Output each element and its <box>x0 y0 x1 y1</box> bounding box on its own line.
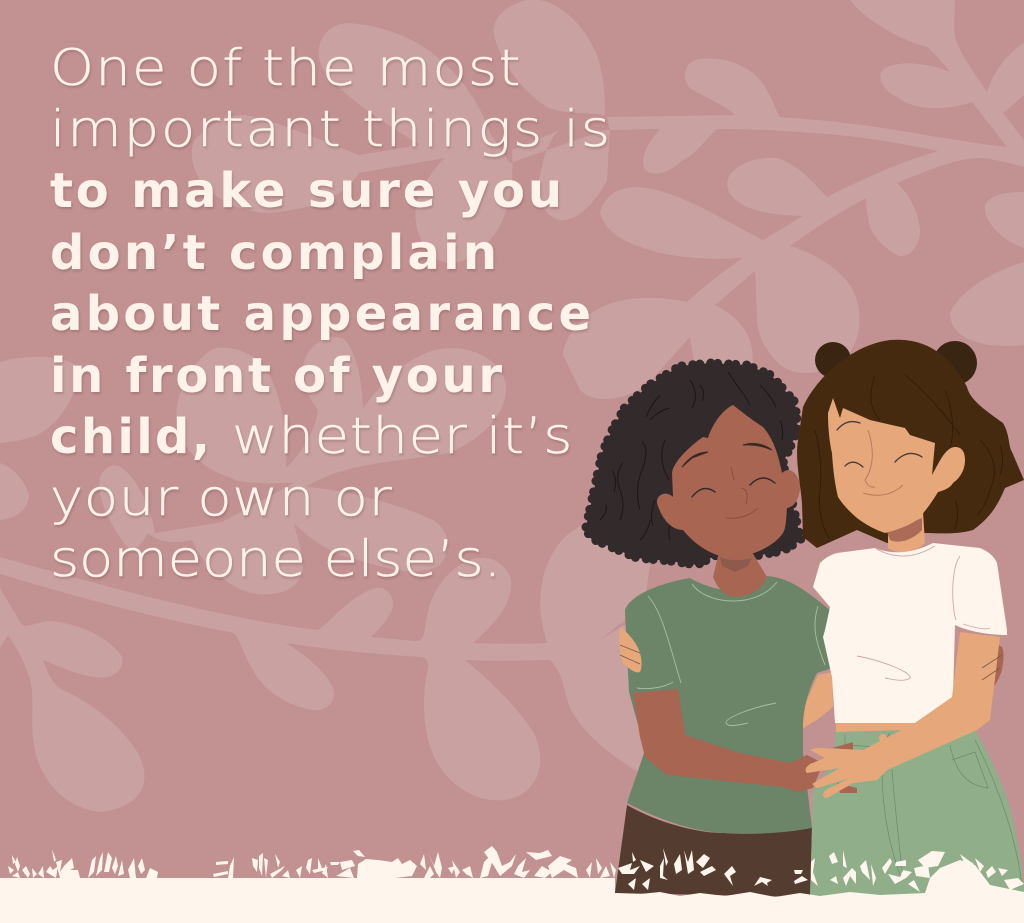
far left sprig <box>0 588 144 812</box>
skirt seams <box>845 733 1022 885</box>
left figure: woman with curly hair <box>586 363 832 897</box>
hair buns <box>815 342 851 378</box>
grass shards centre <box>312 846 616 878</box>
eyebrows <box>682 443 772 467</box>
shirt fold lines <box>637 582 825 726</box>
line two: important things is <box>50 100 610 158</box>
forearm and hand <box>806 632 1000 798</box>
upper leaf near top <box>494 0 605 115</box>
line seven remainder: whether it’s <box>232 407 572 465</box>
dark fingers behind hand <box>832 742 857 793</box>
shirt lines <box>857 546 990 680</box>
right figure: woman with brown hair <box>797 340 1024 900</box>
trousers <box>615 805 812 897</box>
bold line five: about appearance <box>50 286 591 342</box>
bold line four: don’t complain <box>50 225 497 281</box>
finger lines <box>620 645 1002 680</box>
grass on clothing <box>618 848 1024 892</box>
green t-shirt <box>625 576 832 834</box>
midriff <box>836 716 916 733</box>
left woman's eyes <box>692 478 775 497</box>
face and ears <box>657 405 800 558</box>
lower branch with leaves <box>0 520 660 800</box>
left arm behind <box>803 672 833 728</box>
headline text <box>50 39 610 588</box>
hair curls <box>600 372 783 540</box>
hair strands <box>815 375 1002 540</box>
upper right branch <box>563 0 1024 399</box>
bold line six: in front of your <box>50 348 502 404</box>
top centre leaves <box>192 23 610 263</box>
line one: One of the most <box>50 39 520 97</box>
brown hair <box>797 340 1024 548</box>
left edge leaves <box>0 357 78 520</box>
green skirt <box>810 730 1024 900</box>
ground <box>0 860 1024 923</box>
central heart leaves and stem <box>99 337 506 595</box>
hand on green shirt <box>619 627 642 672</box>
grass shards left <box>8 849 340 878</box>
line eight: your own or <box>50 469 392 527</box>
bold line three: to make sure you <box>50 163 562 219</box>
dark hand on arm <box>975 640 1004 696</box>
left woman's arm <box>633 689 823 792</box>
neck shadow <box>720 557 752 572</box>
white t-shirt <box>813 543 1007 723</box>
line nine: someone else’s. <box>50 530 501 588</box>
right woman's hand again over the arm <box>806 740 900 798</box>
neck <box>713 552 767 597</box>
skirt button <box>879 734 887 742</box>
neck shadow <box>887 518 922 542</box>
bold line seven: child, <box>50 409 210 465</box>
face and ear <box>828 398 965 533</box>
mouth and nose <box>863 430 903 495</box>
mouth and nose <box>726 467 758 518</box>
neck <box>888 512 925 552</box>
right edge leaves <box>950 192 1024 346</box>
curly hair <box>586 363 801 565</box>
eyes and brow <box>837 422 922 467</box>
